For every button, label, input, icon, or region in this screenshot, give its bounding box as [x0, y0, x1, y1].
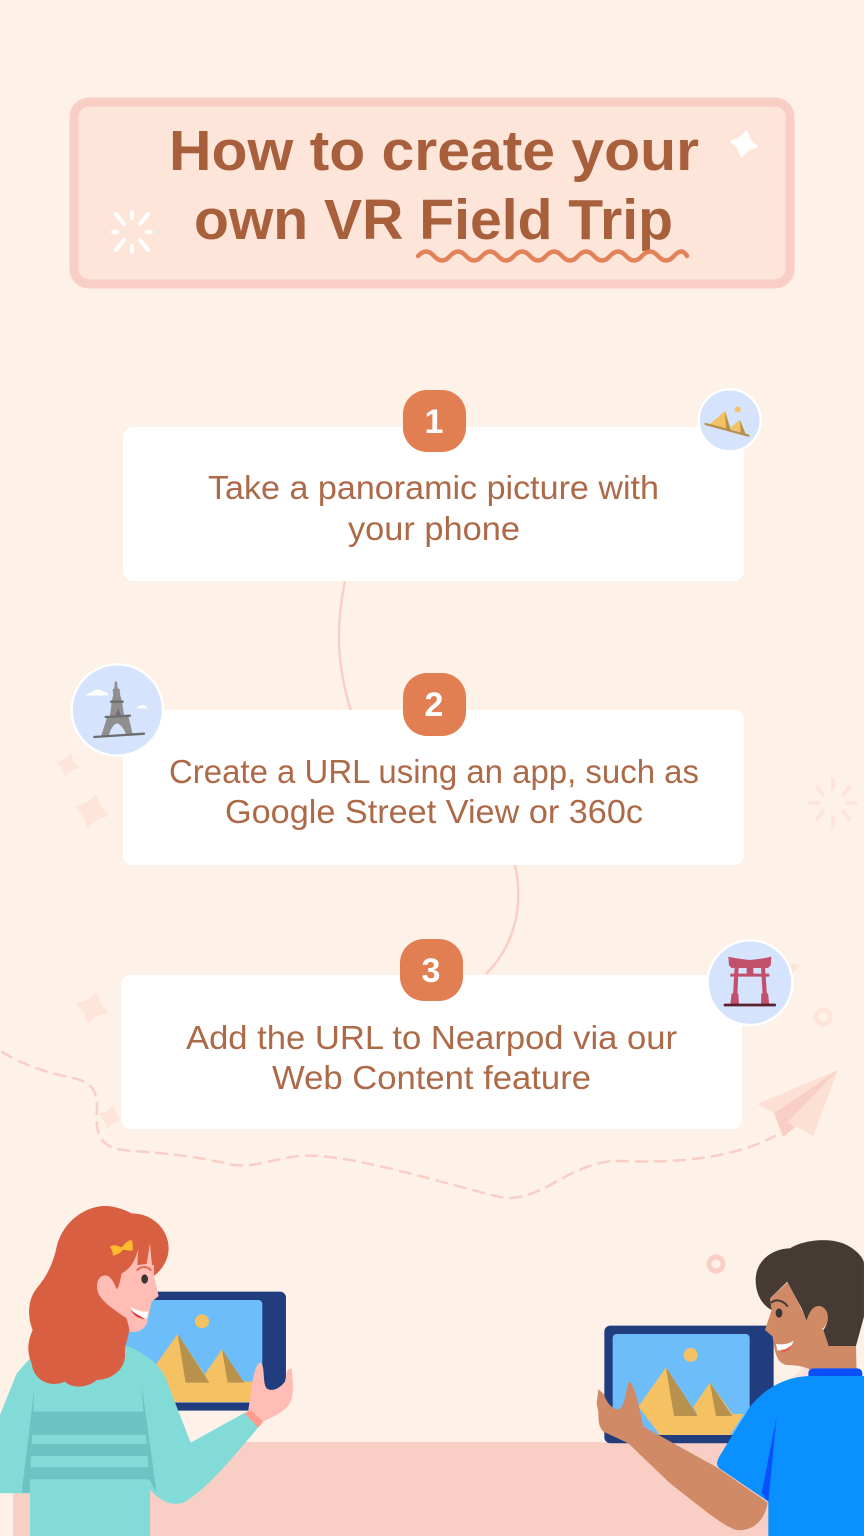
title text: [169, 119, 699, 252]
arm and hand: [597, 1382, 768, 1530]
icon: pyramids: [699, 389, 761, 451]
hand: [248, 1363, 293, 1422]
girl's tablet: [120, 1292, 286, 1411]
dashed flight path: [2, 1052, 775, 1198]
hair bow: [110, 1240, 133, 1256]
step 1 card: [123, 390, 744, 581]
step 3 text: [186, 1019, 677, 1096]
step 2 text: Create a URL using an app, such as: [169, 753, 699, 790]
boy with tablet: [597, 1240, 864, 1536]
icon: white burst: [113, 212, 151, 252]
step 2 card: [123, 673, 744, 865]
inner shirt: [791, 1363, 815, 1378]
background decorations: [56, 753, 856, 1271]
step 1 badge: 1: [425, 403, 443, 441]
hair: [28, 1206, 169, 1387]
floor: [13, 1442, 864, 1536]
step 3 card: [121, 939, 742, 1129]
step 3 text: Add the URL to Nearpod via our: [186, 1019, 677, 1056]
step 1 text: [208, 469, 659, 547]
sweater: [0, 1345, 258, 1536]
title text: own VR Field Trip: [194, 188, 673, 252]
collar: [808, 1368, 862, 1382]
step 3 badge: [400, 939, 463, 1001]
icon: torii gate: [708, 940, 792, 1025]
title text: How to create your: [169, 119, 699, 183]
step 2 badge: [403, 673, 466, 736]
step 1 badge: [403, 390, 466, 452]
connector lines: [339, 581, 518, 974]
icon: white sparkle: [730, 130, 758, 158]
title panel: [74, 102, 790, 284]
boy's tablet: [604, 1326, 774, 1443]
hair: [756, 1240, 864, 1346]
step 1 text: your phone: [348, 510, 520, 547]
icon: eiffel tower: [72, 664, 163, 756]
neck and face: [765, 1282, 857, 1372]
girl with tablet: [0, 1206, 293, 1536]
paper plane: [757, 1070, 838, 1137]
step 2 badge: 2: [425, 686, 443, 724]
shirt fold: [762, 1417, 777, 1502]
step 2 text: [169, 753, 699, 830]
cuff: [244, 1410, 263, 1428]
step 1 text: Take a panoramic picture with: [208, 469, 659, 506]
step 3 badge: 3: [422, 952, 440, 990]
step 2 text: Google Street View or 360c: [225, 793, 643, 830]
face: [97, 1243, 159, 1332]
wavy underline: [418, 252, 687, 260]
shirt: [717, 1376, 864, 1536]
step 3 text: Web Content feature: [272, 1059, 591, 1096]
